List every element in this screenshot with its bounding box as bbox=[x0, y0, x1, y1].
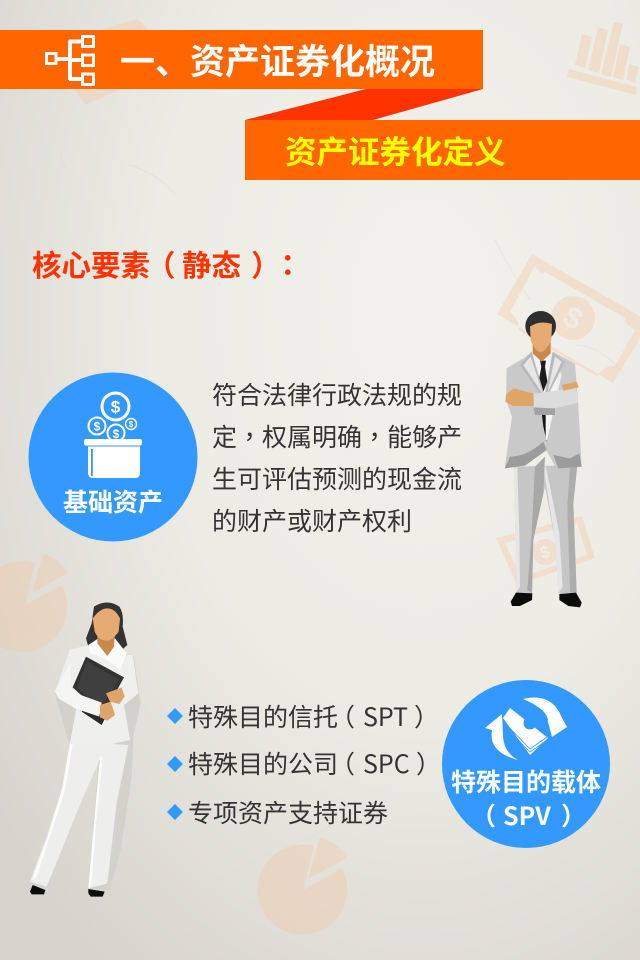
fold of ribbon bbox=[245, 89, 483, 120]
hair bbox=[86, 602, 127, 650]
hands bbox=[106, 687, 125, 704]
section heading: 核心要素 bbox=[32, 250, 150, 283]
section heading: （ bbox=[146, 243, 176, 285]
shoes bbox=[511, 593, 532, 606]
watermark: pie left bbox=[0, 554, 68, 652]
text block: base asset description: 符合法律行政法规的规 bbox=[212, 382, 462, 410]
section heading: ） bbox=[251, 243, 281, 285]
text block: base asset description bbox=[212, 382, 462, 536]
badge label line 2: （ bbox=[471, 797, 496, 833]
heading text: 一、资产证券化概况 bbox=[120, 43, 435, 82]
hands bbox=[505, 388, 534, 406]
watermark: small bill bbox=[496, 516, 595, 585]
panel: SPV badge bbox=[442, 680, 610, 848]
list item: company: ） bbox=[416, 745, 441, 781]
tie bbox=[539, 361, 547, 392]
sleeve bbox=[55, 663, 102, 717]
text block: base asset description: 的财产或财产权利 bbox=[212, 508, 412, 536]
trousers bbox=[514, 465, 577, 593]
icon: coins and box: $ bbox=[129, 420, 134, 429]
list item: trust bbox=[167, 698, 439, 734]
icon: cash stack with circular arrows bbox=[485, 698, 567, 760]
list item: securities: 专项资产支持证券 bbox=[188, 800, 388, 828]
shirt and belt bbox=[530, 357, 558, 447]
jacket bbox=[505, 352, 582, 468]
dollar signs on watermarks bbox=[538, 300, 588, 563]
watermark: bar chart bbox=[567, 22, 639, 95]
panel: base asset badge bbox=[28, 372, 198, 542]
watermark: pie bottom bbox=[257, 837, 347, 934]
list item: company: SPC bbox=[363, 745, 410, 781]
list item: company: （ bbox=[330, 745, 355, 781]
icon: coins and box: $ bbox=[113, 427, 120, 441]
figure: businesswoman bbox=[30, 602, 141, 897]
dollar signs on watermarks: $ bbox=[538, 542, 553, 563]
section heading: ： bbox=[273, 243, 303, 285]
icon: hierarchy tree bbox=[46, 36, 94, 84]
subheading text: 资产证券化定义 bbox=[285, 134, 506, 170]
badge label: 基础资产 bbox=[63, 489, 163, 517]
trousers bbox=[30, 742, 128, 888]
neck bbox=[533, 342, 551, 362]
list item: company: 特殊目的公司 bbox=[188, 751, 338, 779]
folder bbox=[73, 657, 124, 725]
shadow under suit bbox=[55, 650, 141, 890]
list item: company bbox=[167, 745, 441, 781]
list item: trust: 特殊目的信托 bbox=[188, 704, 338, 732]
badge label line 2: ） bbox=[561, 797, 586, 833]
shoes bbox=[30, 885, 45, 894]
text block: base asset description: 生可评估预测的现金流 bbox=[212, 466, 462, 494]
banner: main heading bbox=[0, 30, 483, 89]
jacket bbox=[55, 645, 138, 745]
watermark: bill behind banner bbox=[75, 19, 150, 105]
face bbox=[93, 608, 120, 641]
text block: base asset description: 定，权属明确，能够产 bbox=[212, 418, 462, 454]
list item: trust: SPT bbox=[363, 698, 408, 734]
icon: coins and box bbox=[84, 393, 142, 478]
section heading: 静态 bbox=[182, 250, 241, 283]
icon: coins and box: $ bbox=[94, 420, 101, 434]
list item: trust: ） bbox=[414, 698, 439, 734]
neck bbox=[97, 632, 115, 656]
watermark: large bill with dollar coin bbox=[497, 254, 640, 383]
face bbox=[530, 322, 552, 352]
badge label line 1: 特殊目的载体 bbox=[451, 769, 601, 797]
hair bbox=[525, 311, 556, 341]
figure: businessman bbox=[505, 311, 582, 607]
badge label line 2: SPV bbox=[503, 797, 551, 833]
banner: subheading bbox=[245, 120, 640, 180]
icon: coins and box: $ bbox=[111, 398, 121, 416]
bullet list: SPV forms bbox=[167, 698, 441, 828]
dollar signs on watermarks: $ bbox=[557, 300, 588, 337]
list item: trust: （ bbox=[330, 698, 355, 734]
crossed arm bbox=[533, 387, 578, 408]
